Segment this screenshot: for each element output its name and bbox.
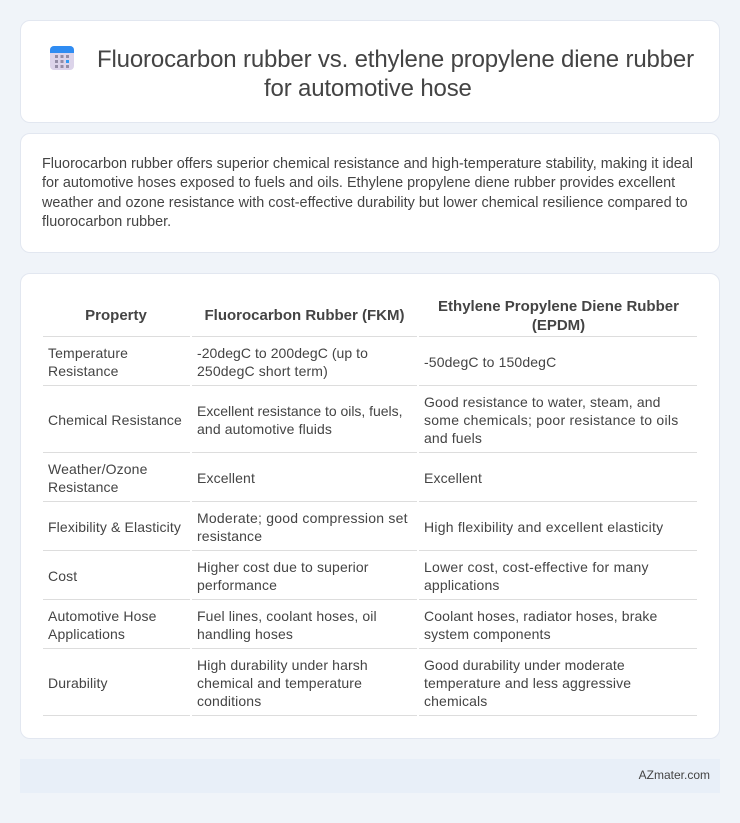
- row: applications: [48, 608, 657, 642]
- row: flexibility: High flexibility and excellent elasticity: [424, 519, 663, 535]
- row: durability: chemicals: [424, 693, 487, 709]
- row: flexibility: Moderate; good compression set: [197, 510, 408, 526]
- row: temperature: Temperature: [48, 345, 128, 361]
- row: chemical: and fuels: [424, 430, 482, 446]
- row: durability: High durability under harsh: [197, 657, 368, 673]
- intro text: weather and ozone resistance with cost-effective durability but lower chemical resilience compared to: [42, 195, 688, 211]
- row: durability: Durability: [48, 675, 108, 691]
- header card: [20, 20, 720, 123]
- row: applications: handling hoses: [197, 626, 293, 642]
- table header: Property: [85, 307, 147, 324]
- row: chemical: and automotive fluids: [197, 421, 332, 437]
- row: temperature: 250degC short term): [197, 363, 328, 379]
- intro text: [42, 156, 693, 230]
- row: durability: Good durability under moderate: [424, 657, 625, 673]
- row: durability: conditions: [197, 693, 261, 709]
- footer bar: AZmater.com: [639, 768, 710, 782]
- row: applications: Automotive Hose: [48, 608, 157, 624]
- row: chemical: [48, 394, 678, 446]
- table header: (EPDM): [532, 317, 585, 334]
- row: flexibility: [48, 510, 664, 544]
- row: applications: Coolant hoses, radiator hoses, brake: [424, 608, 657, 624]
- row: applications: Fuel lines, coolant hoses, oil: [197, 608, 377, 624]
- icon: calendar: [50, 46, 74, 70]
- row: chemical: Chemical Resistance: [48, 412, 182, 428]
- row: cost: applications: [424, 577, 500, 593]
- footer bar: [20, 759, 720, 793]
- table header: Ethylene Propylene Diene Rubber: [438, 298, 679, 315]
- row: weather: Resistance: [48, 479, 119, 495]
- row: flexibility: resistance: [197, 528, 262, 544]
- title: for automotive hose: [264, 75, 472, 102]
- intro text: Fluorocarbon rubber offers superior chemical resistance and high-temperature stability, making it ideal: [42, 156, 693, 172]
- row: applications: Applications: [48, 626, 125, 642]
- row: durability: temperature and less aggressive: [424, 675, 631, 691]
- row: chemical: some chemicals; poor resistance to oils: [424, 412, 678, 428]
- row: temperature: -20degC to 200degC (up to: [197, 345, 368, 361]
- row: cost: Cost: [48, 568, 77, 584]
- table header: [85, 298, 679, 334]
- row: flexibility: Flexibility & Elasticity: [48, 519, 181, 535]
- intro text: fluorocarbon rubber.: [42, 214, 171, 230]
- row: applications: system components: [424, 626, 551, 642]
- title: Fluorocarbon rubber vs. ethylene propylene diene rubber: [97, 46, 694, 73]
- row: temperature: Resistance: [48, 363, 119, 379]
- row: weather: Excellent: [197, 470, 255, 486]
- row: cost: Higher cost due to superior: [197, 559, 369, 575]
- row: weather: Excellent: [424, 470, 482, 486]
- row: cost: performance: [197, 577, 277, 593]
- row: cost: [48, 559, 649, 593]
- table card: [20, 273, 720, 739]
- intro text: for automotive hoses exposed to fuels and oils. Ethylene propylene diene rubber provides excellent: [42, 175, 675, 191]
- row: chemical: Good resistance to water, steam, and: [424, 394, 661, 410]
- row: chemical: Excellent resistance to oils, fuels,: [197, 403, 402, 419]
- row: durability: chemical and temperature: [197, 675, 362, 691]
- row: cost: Lower cost, cost-effective for many: [424, 559, 649, 575]
- intro card: [20, 133, 720, 253]
- row: weather: [48, 461, 482, 495]
- row: temperature: [48, 345, 556, 379]
- table header: Fluorocarbon Rubber (FKM): [204, 307, 404, 324]
- row: durability: [48, 657, 631, 709]
- title: [97, 46, 694, 102]
- row: weather: Weather/Ozone: [48, 461, 148, 477]
- row: temperature: -50degC to 150degC: [424, 354, 556, 370]
